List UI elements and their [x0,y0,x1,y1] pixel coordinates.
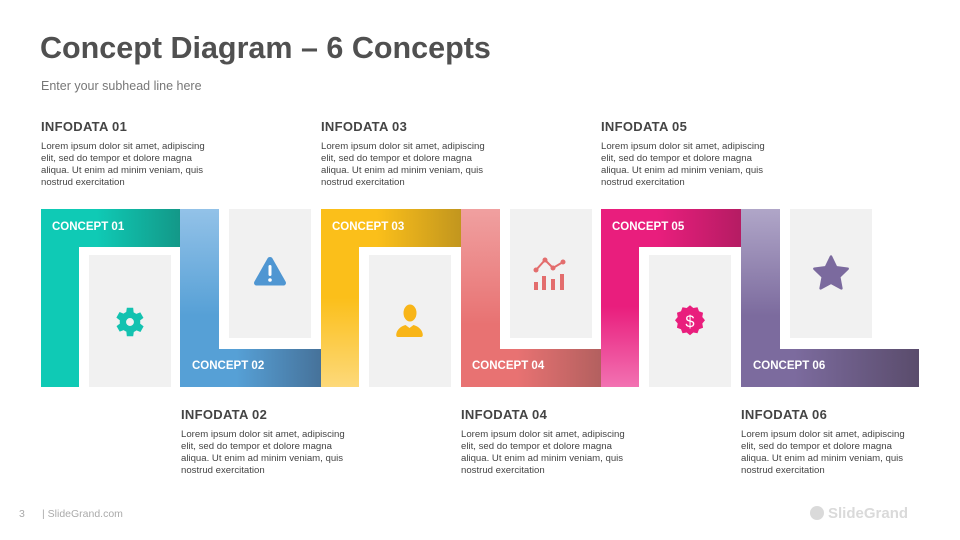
text block: infodata 06: INFODATA 06 [741,407,827,422]
concept 02 [180,209,321,387]
concept 05 [601,209,741,387]
concept 04: CONCEPT 04 [472,360,544,372]
text block: infodata 02 [181,407,345,476]
text block: infodata 02: INFODATA 02 [181,407,267,422]
text block: infodata 03: Lorem ipsum dolor sit amet, adipiscing elit, sed do tempor et dolore magna aliqua. Ut enim ad minim veniam, quis nostrud exercitation [321,141,485,188]
concept 02: CONCEPT 02 [192,360,264,372]
concept 05: CONCEPT 05 [612,221,684,233]
icon: chart [534,258,566,290]
icon: money gear: $ [685,313,695,331]
logo: SlideGrand [828,505,908,522]
text block: infodata 03: INFODATA 03 [321,119,407,134]
text block: infodata 04: INFODATA 04 [461,407,547,422]
text block: infodata 03 [321,119,485,188]
icon: person [396,304,423,337]
concept 03: CONCEPT 03 [332,221,404,233]
text block: infodata 05: INFODATA 05 [601,119,687,134]
concept 06 [741,209,919,387]
icon: warning [254,257,286,286]
text block: infodata 04 [461,407,625,476]
icon: star [813,255,849,290]
footer: site: | SlideGrand.com [42,508,123,520]
concept 04 [461,209,601,387]
concept 06: CONCEPT 06 [753,360,825,372]
text block: infodata 05: Lorem ipsum dolor sit amet, adipiscing elit, sed do tempor et dolore magna aliqua. Ut enim ad minim veniam, quis nostrud exercitation [601,141,765,188]
text block: infodata 01: INFODATA 01 [41,119,127,134]
concept 01: CONCEPT 01 [52,221,124,233]
text block: infodata 06: Lorem ipsum dolor sit amet, adipiscing elit, sed do tempor et dolore magna aliqua. Ut enim ad minim veniam, quis nostrud exercitation [741,429,905,476]
subhead: Enter your subhead line here [41,79,202,93]
icon: gear [116,308,144,336]
text block: infodata 01 [41,119,205,188]
footer: page number: 3 [19,508,25,520]
text block: infodata 05 [601,119,765,188]
icon: money gear [675,305,705,336]
text block: infodata 06 [741,407,905,476]
concept 01 [41,209,180,387]
text block: infodata 02: Lorem ipsum dolor sit amet, adipiscing elit, sed do tempor et dolore magna aliqua. Ut enim ad minim veniam, quis nostrud exercitation [181,429,345,476]
concept 03 [321,209,461,387]
title: Concept Diagram – 6 Concepts [40,31,491,65]
text block: infodata 04: Lorem ipsum dolor sit amet, adipiscing elit, sed do tempor et dolore magna aliqua. Ut enim ad minim veniam, quis nostrud exercitation [461,429,625,476]
text block: infodata 01: Lorem ipsum dolor sit amet, adipiscing elit, sed do tempor et dolore magna aliqua. Ut enim ad minim veniam, quis nostrud exercitation [41,141,205,188]
